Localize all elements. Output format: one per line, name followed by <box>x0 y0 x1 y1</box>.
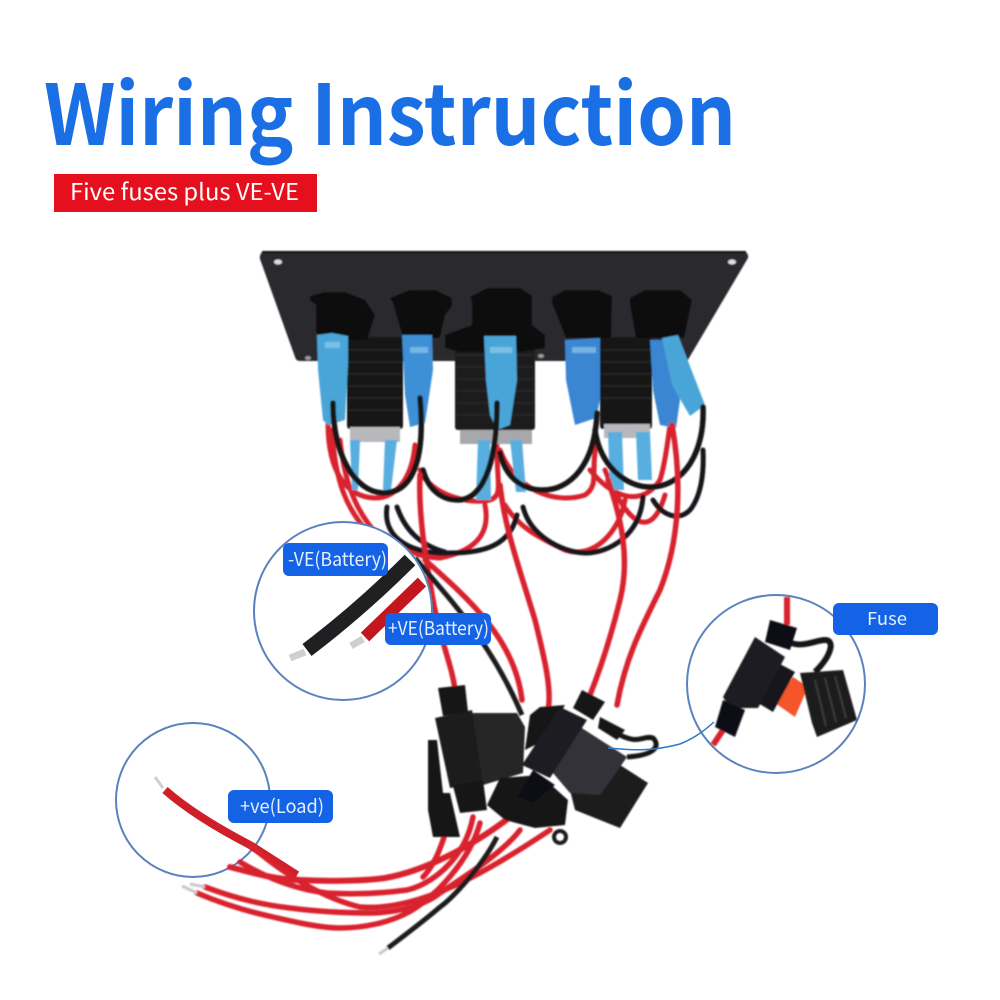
black battery wire <box>415 558 522 715</box>
lower black loops <box>386 450 703 553</box>
lower blue terminals <box>350 432 652 500</box>
callout: battery <box>254 522 491 700</box>
lower red loops <box>328 423 670 558</box>
leader arrow to fuse <box>608 722 714 750</box>
blue terminals <box>317 333 705 430</box>
right fuse <box>517 690 656 828</box>
black load wire <box>388 837 497 948</box>
switch panel with wiring <box>182 251 748 954</box>
fuse detail <box>713 597 857 745</box>
+VE label: +VE(Battery) <box>388 614 489 641</box>
-VE battery wire <box>307 560 410 650</box>
bolts behind terminals <box>347 337 652 444</box>
callout: fuse <box>687 595 938 773</box>
callout: load <box>116 723 333 877</box>
middle clutter of connectors <box>487 775 568 828</box>
upper black loops <box>333 398 703 500</box>
load wire <box>165 790 297 875</box>
-VE label: -VE(Battery) <box>288 545 387 572</box>
title: Wiring Instruction <box>44 49 736 170</box>
fuse label <box>833 603 938 635</box>
bare wire tips <box>290 639 363 658</box>
subtitle banner: Five fuses plus VE-VE <box>70 173 299 207</box>
+VE battery wire <box>365 582 422 637</box>
black mounting plate <box>260 251 748 361</box>
main red wires <box>420 425 678 710</box>
+ve load label: +ve(Load) <box>240 792 324 819</box>
inline fuse holders <box>428 685 656 843</box>
wire tips <box>182 884 388 954</box>
load wires <box>197 807 550 928</box>
fuse label: Fuse <box>867 605 907 631</box>
switch collars <box>310 288 692 352</box>
left fuse <box>435 685 525 813</box>
back fuse <box>428 740 460 837</box>
+ve load label <box>228 790 333 823</box>
